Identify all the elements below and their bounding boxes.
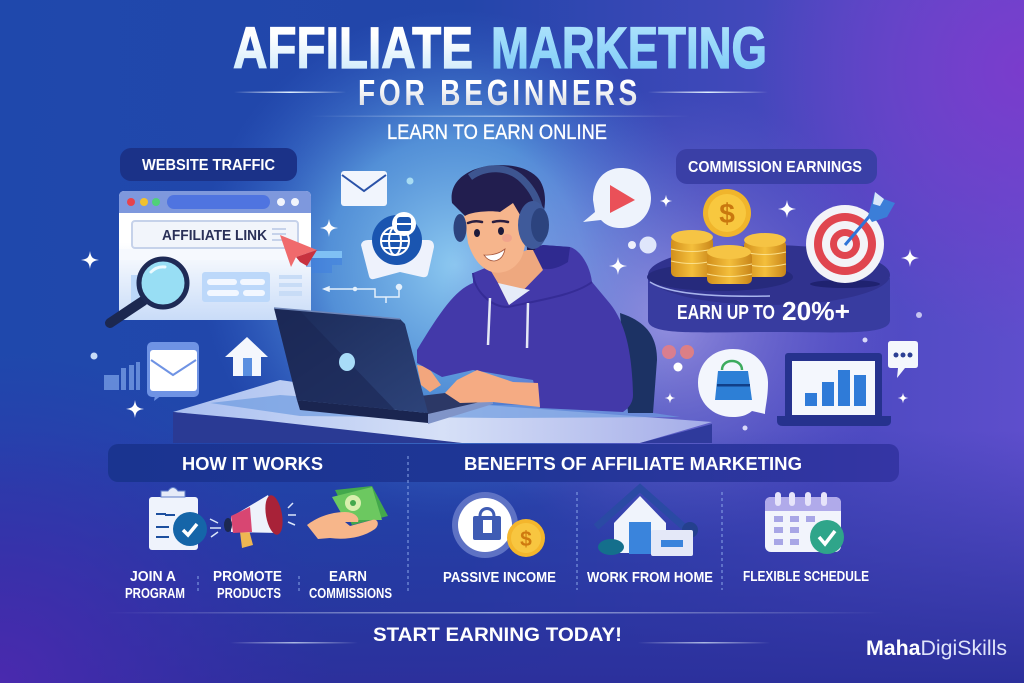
heading: how it works: HOW IT WORKS [182, 453, 323, 474]
decorative dots pink [662, 345, 694, 372]
icon: globe envelope [361, 212, 434, 279]
icon: cursor arrow [280, 235, 342, 273]
hair [452, 165, 545, 250]
headphones [454, 169, 549, 249]
top coin: $ [719, 198, 735, 229]
left stack [671, 230, 713, 277]
chair [620, 313, 657, 413]
laptop logo [339, 353, 355, 371]
affiliate link box: AFFILIATE LINK [162, 227, 267, 244]
hood interior [530, 245, 570, 269]
labels: benefits: PASSIVE INCOME [443, 570, 556, 586]
call to action: START EARNING TODAY! [373, 624, 622, 646]
browser window [119, 191, 311, 320]
pill: website traffic [120, 148, 297, 181]
affiliate link box [132, 221, 298, 248]
commission text: EARN UP TO [677, 302, 775, 324]
left hand [417, 365, 441, 392]
bar chart [805, 370, 866, 406]
labels: how it works [125, 569, 392, 602]
icon: chat bubble [888, 341, 918, 378]
commission text: 20%+ [782, 296, 850, 326]
icon: clipboard [149, 488, 221, 550]
title: affiliate marketing: AFFILIATE [233, 16, 473, 81]
icon: megaphone [224, 494, 296, 548]
middle stack [707, 245, 752, 284]
neck [488, 248, 543, 305]
labels: how it works: COMMISSIONS [309, 586, 392, 602]
subtitle: for beginners: FOR BEGINNERS [358, 73, 637, 113]
labels: benefits: WORK FROM HOME [587, 570, 713, 586]
commission platform [647, 245, 890, 332]
pill: commission earnings: COMMISSION EARNINGS [688, 159, 862, 176]
icon: envelope [341, 171, 387, 206]
labels: how it works: PROMOTE [213, 569, 282, 585]
desk [173, 380, 712, 443]
dashed dividers [198, 456, 722, 593]
commission text [677, 296, 850, 326]
laptop [274, 308, 493, 424]
labels: how it works: JOIN A [130, 569, 177, 585]
shirt collar [498, 283, 530, 305]
bottom header band [108, 444, 899, 482]
eyes and mouth [468, 221, 512, 261]
hoodie [417, 245, 633, 412]
labels: benefits [443, 569, 869, 586]
title: affiliate marketing [233, 16, 767, 81]
icon: work from home [596, 488, 698, 556]
icon: shopping bag bubble [698, 349, 768, 417]
face [464, 202, 527, 273]
dots [628, 236, 656, 254]
circuit line [324, 284, 402, 303]
labels: how it works: PROGRAM [125, 586, 185, 602]
icon: stat bars and mail [104, 342, 199, 401]
icon: passive income [452, 492, 545, 558]
labels: how it works: EARN [329, 569, 367, 585]
icon: house [225, 337, 268, 376]
icon: laptop chart [777, 353, 891, 426]
icon: calendar [765, 492, 844, 554]
labels: how it works: PRODUCTS [217, 586, 281, 602]
sparkles and dots [81, 178, 922, 430]
tagline: LEARN TO EARN ONLINE [387, 121, 607, 144]
person [417, 165, 633, 412]
icon: target and dart [806, 192, 895, 288]
logo: mahadigiskills: MahaDigiSkills [866, 637, 1007, 660]
pill: commission earnings [676, 149, 877, 184]
title block [233, 16, 768, 144]
labels: benefits: FLEXIBLE SCHEDULE [743, 569, 869, 585]
icon: passive income: $ [520, 528, 532, 551]
right hand [445, 370, 540, 407]
icon: play bubble [583, 168, 651, 228]
hood strings [488, 298, 528, 348]
heading: benefits: BENEFITS OF AFFILIATE MARKETING [464, 453, 802, 474]
pill: website traffic: WEBSITE TRAFFIC [142, 157, 275, 174]
hood lip [473, 273, 592, 307]
right stack [744, 233, 786, 277]
icon: hand with money [307, 486, 388, 539]
icon: coin stacks [671, 189, 786, 284]
icon: magnifying glass [110, 259, 187, 323]
title: affiliate marketing: MARKETING [491, 16, 767, 81]
